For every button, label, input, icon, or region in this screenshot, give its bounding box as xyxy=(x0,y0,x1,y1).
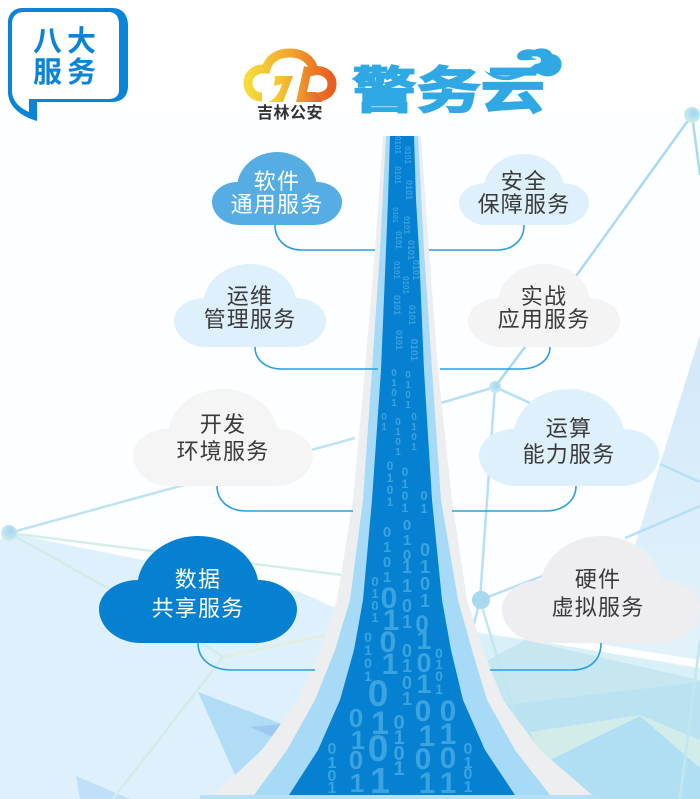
binary digits in tower: 0101 xyxy=(402,216,411,234)
speech bubble badge: 八大服务: 服务 xyxy=(33,56,101,89)
cloud: 实战应用服务 xyxy=(468,264,620,347)
speech bubble badge: 八大服务: 八大 xyxy=(33,25,101,58)
title: 警务云: 警务云 xyxy=(352,63,545,119)
binary digits in tower: 0101 xyxy=(401,276,410,294)
cloud: 运维管理服务 xyxy=(174,264,326,347)
speech bubble badge: 八大服务 xyxy=(8,8,128,121)
binary digits in tower: 0 xyxy=(349,745,363,775)
binary digits in tower: 0 xyxy=(440,742,456,775)
cloud: 实战应用服务: 应用服务 xyxy=(498,307,590,332)
binary digits in tower: 0 xyxy=(420,488,428,503)
binary digits in tower: 1 xyxy=(383,569,391,586)
tower base strip xyxy=(200,795,600,799)
binary digits in tower: 0 xyxy=(328,741,337,758)
binary digits in tower: 1 xyxy=(403,532,411,549)
binary digits in tower: 0 xyxy=(381,412,387,423)
binary digits in tower: 0 xyxy=(440,695,456,728)
cloud: 运维管理服务: 管理服务 xyxy=(204,307,296,332)
binary digits in tower: 0101 xyxy=(411,260,421,280)
binary digits in tower: 0 xyxy=(420,574,430,594)
logo: Jilin police cloud: 吉林公安 xyxy=(257,104,323,122)
cloud: 软件通用服务 xyxy=(212,152,342,225)
connector lines xyxy=(198,225,601,670)
binary digits in tower: 0 xyxy=(364,629,372,645)
cloud: 安全保障服务: 保障服务 xyxy=(478,192,570,217)
binary digits in tower: 1 xyxy=(371,705,389,741)
binary digits in tower: 1 xyxy=(402,576,412,596)
cloud: 开发环境服务: 环境服务 xyxy=(177,439,269,464)
binary digits in tower: 0101 xyxy=(403,146,412,164)
binary digits in tower: 1 xyxy=(416,625,432,655)
binary digits in tower: 0 xyxy=(405,390,411,401)
binary digits in tower: 0 xyxy=(368,728,388,769)
binary digits in tower: 0101 xyxy=(407,305,417,325)
binary digits in tower: 0101 xyxy=(391,207,398,223)
binary digits in tower: 1 xyxy=(411,442,417,453)
binary digits in tower: 0101 xyxy=(404,180,414,200)
binary digits in tower: 1 xyxy=(387,495,394,509)
binary digits in tower: 1 xyxy=(371,586,379,601)
binary digits in tower: 1 xyxy=(391,398,397,409)
binary digits in tower: 1 xyxy=(402,656,412,676)
binary digits in tower: 1 xyxy=(405,380,411,391)
binary digits in tower: 1 xyxy=(383,539,391,556)
binary digits in tower: 1 xyxy=(364,642,372,658)
binary digits in tower: 1 xyxy=(435,656,443,672)
logo: Jilin police cloud xyxy=(248,53,332,122)
binary digits in tower: 1 xyxy=(391,378,397,389)
binary digits in tower: 0 xyxy=(464,766,473,783)
binary digits in tower: 0 xyxy=(420,540,430,560)
binary digits in tower: 0101 xyxy=(392,261,401,279)
binary digits in tower: 1 xyxy=(402,501,409,515)
binary digits in tower: 1 xyxy=(350,768,364,798)
cloud: 开发环境服务 xyxy=(133,389,313,486)
cloud: 软件通用服务: 软件 xyxy=(254,169,300,194)
cloud: 软件通用服务: 通用服务 xyxy=(231,192,323,217)
binary digits in tower: 1 xyxy=(395,427,401,438)
cloud: 数据共享服务: 共享服务 xyxy=(152,596,244,621)
cloud: 运算能力服务: 运算 xyxy=(546,416,592,441)
cloud: 数据共享服务: 数据 xyxy=(175,567,221,592)
binary digits in tower: 0 xyxy=(395,417,401,428)
binary digits in tower: 1 xyxy=(328,780,337,797)
binary digits in tower: 0 xyxy=(381,582,397,615)
binary digits in tower: 0101 xyxy=(394,330,404,350)
binary digits in tower: 0 xyxy=(415,611,429,638)
binary digits in tower: 0 xyxy=(415,743,431,776)
binary digits in tower: 1 xyxy=(328,755,337,772)
binary digits in tower: 0 xyxy=(435,645,443,661)
binary digits in tower: 0 xyxy=(411,432,417,443)
binary digits in tower: 0 xyxy=(402,641,412,661)
binary digits in tower: 1 xyxy=(402,689,412,709)
cloud: 安全保障服务 xyxy=(459,154,589,225)
binary digits in tower: 0 xyxy=(464,741,473,758)
binary digits in tower: 0101 xyxy=(408,339,419,362)
binary digits in tower: 1 xyxy=(402,612,412,632)
binary digits in tower: 0 xyxy=(395,437,401,448)
binary digits in tower: 0 xyxy=(380,626,396,659)
binary digits in tower: 0 xyxy=(371,598,379,613)
binary digits in tower: 1 xyxy=(364,668,372,684)
binary digits in tower: 0 xyxy=(349,703,363,733)
binary digits in tower: 0101 xyxy=(394,231,403,249)
binary digits in tower: 0 xyxy=(402,489,409,503)
binary digits in tower: 1 xyxy=(420,557,430,577)
binary digits in tower: 0 xyxy=(405,370,411,381)
binary digits in tower: 1 xyxy=(381,422,387,433)
binary digits in tower: 0 xyxy=(391,388,397,399)
binary digits in tower: 1 xyxy=(393,758,405,780)
binary digits in tower: 1 xyxy=(440,718,456,751)
cloud: 实战应用服务: 实战 xyxy=(521,284,567,309)
binary digits in tower: 0 xyxy=(402,465,409,479)
cloud: 运算能力服务 xyxy=(479,389,659,486)
binary digits in tower: 0 xyxy=(435,668,443,684)
binary digits in tower: 1 xyxy=(395,447,401,458)
binary digits in tower: 1 xyxy=(416,669,432,699)
tower: gray outer band xyxy=(213,136,592,795)
binary digits in tower: 0 xyxy=(403,547,411,564)
cloud: 硬件虚拟服务: 虚拟服务 xyxy=(552,595,644,620)
cloud: 数据共享服务 xyxy=(99,536,297,643)
binary digits in tower: 1 xyxy=(411,422,417,433)
binary digits in tower: 0101 xyxy=(392,295,402,315)
binary digits in tower: 1 xyxy=(420,591,430,611)
binary digits in tower xyxy=(328,136,473,799)
binary digits in tower: 0 xyxy=(368,673,388,714)
binary digits in tower: 0 xyxy=(387,483,394,497)
binary digits in tower: 1 xyxy=(464,755,473,772)
binary digits in tower: 0 xyxy=(411,412,417,423)
binary digits in tower: 0 xyxy=(415,695,431,728)
cloud: 运维管理服务: 运维 xyxy=(227,284,273,309)
binary digits in tower: 0 xyxy=(383,554,391,571)
tower: dark blue core xyxy=(289,136,515,795)
binary digits in tower: 0101 xyxy=(393,166,402,184)
binary digits in tower: 0 xyxy=(328,768,337,785)
binary digits in tower: 0 xyxy=(393,743,405,765)
binary digits in tower: 1 xyxy=(371,610,379,625)
binary digits in tower: 0 xyxy=(416,648,432,678)
binary digits in tower: 1 xyxy=(383,604,399,637)
binary digits in tower: 0 xyxy=(402,673,412,693)
binary digits in tower: 0 xyxy=(402,596,412,616)
binary digits in tower: 1 xyxy=(419,720,435,753)
binary digits in tower: 0 xyxy=(391,368,397,379)
binary digits in tower: 0 xyxy=(387,459,394,473)
binary digits in tower: 0 xyxy=(371,574,379,589)
binary digits in tower: 1 xyxy=(435,681,443,697)
cloud: 硬件虚拟服务: 硬件 xyxy=(575,567,621,592)
cloud: 硬件虚拟服务 xyxy=(502,536,700,643)
binary digits in tower: 0 xyxy=(364,655,372,671)
binary digits in tower: 1 xyxy=(393,727,405,749)
cloud: 开发环境服务: 开发 xyxy=(200,412,246,437)
binary digits in tower: 0 xyxy=(393,712,405,734)
binary digits in tower: 1 xyxy=(402,557,412,577)
binary digits in tower: 0101 xyxy=(406,240,416,260)
cloud: 运算能力服务: 能力服务 xyxy=(523,442,615,467)
binary digits in tower: 1 xyxy=(387,471,394,485)
binary digits in tower: 0 xyxy=(403,517,411,534)
binary digits in tower: 1 xyxy=(402,477,409,491)
binary digits in tower: 1 xyxy=(351,725,365,755)
binary digits in tower: 1 xyxy=(464,779,473,796)
binary digits in tower: 1 xyxy=(405,400,411,411)
binary digits in tower: 0 xyxy=(383,524,391,541)
binary digits in tower: 1 xyxy=(382,648,398,681)
binary digits in tower: 1 xyxy=(420,501,428,516)
cloud: 安全保障服务: 安全 xyxy=(501,169,547,194)
title: 警务云 xyxy=(352,48,562,119)
tower: light blue band xyxy=(254,136,550,795)
binary digits in tower: 0101 xyxy=(393,136,402,154)
